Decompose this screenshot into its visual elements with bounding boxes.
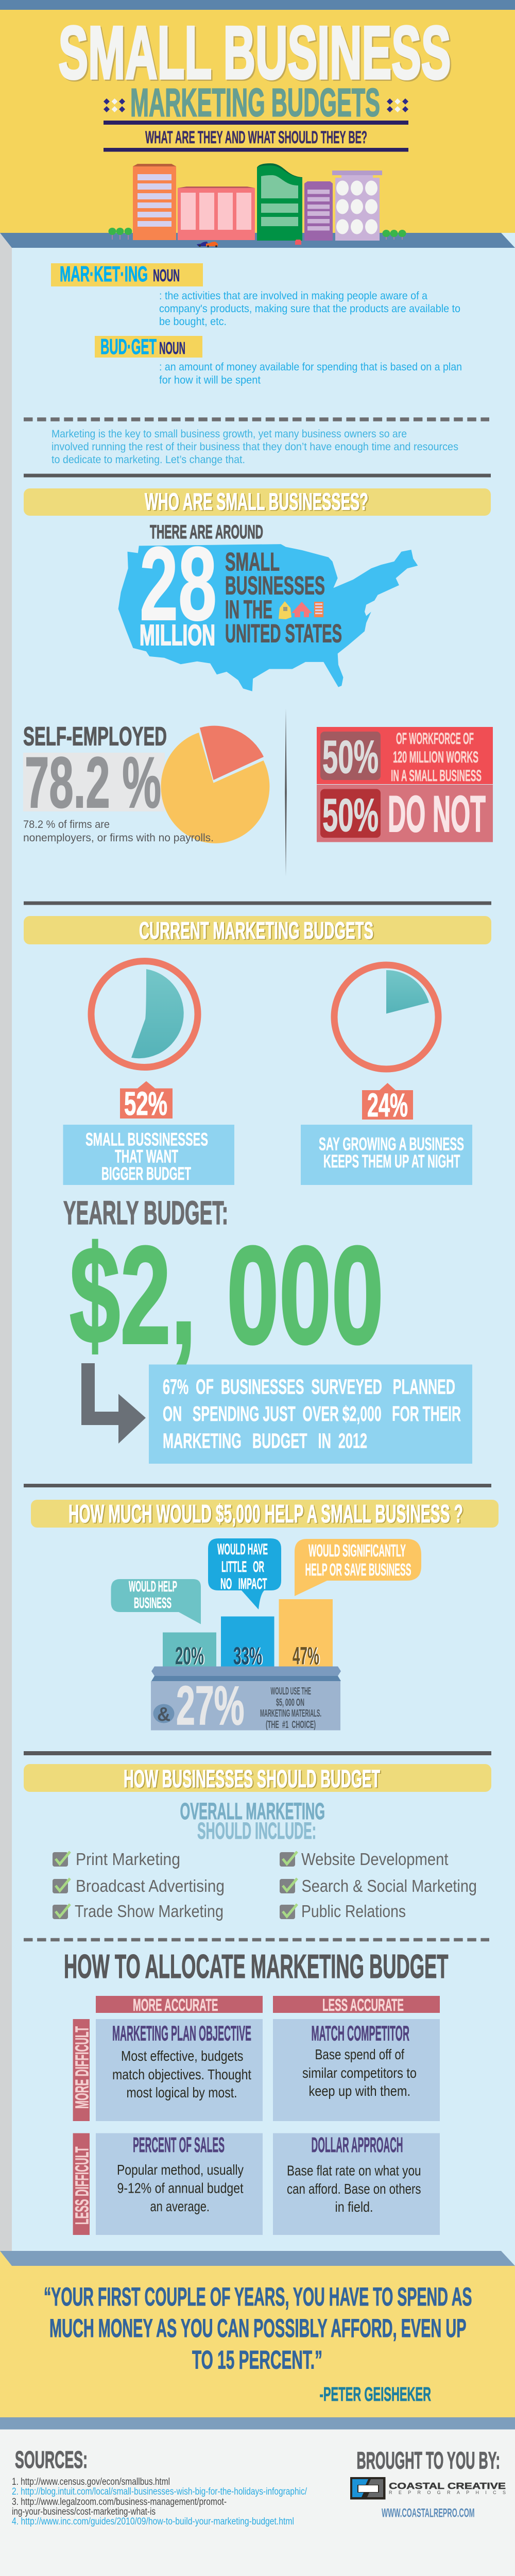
label: budget: NOUN xyxy=(159,338,185,358)
road band xyxy=(0,233,515,248)
text: small businesses in the united states: UNITED STATES xyxy=(225,619,342,648)
heading: who are small businesses xyxy=(24,488,491,516)
text: self-employed caption xyxy=(23,819,214,844)
cell: dollar approach: can afford. Base on others xyxy=(287,2181,421,2197)
cell: percent of sales: PERCENT OF SALES xyxy=(133,2133,225,2157)
callout: 67 percent xyxy=(149,1364,472,1464)
text: small businesses in the united states: BUSINESSES xyxy=(225,571,325,600)
background: light blue body xyxy=(0,232,515,2267)
heading: current marketing budgets xyxy=(24,916,491,945)
list: sources: ing-your-business/cost-marketing-what-is xyxy=(12,2506,156,2517)
callout: keeps them up at night xyxy=(301,1125,472,1185)
bubble: significantly help: WOULD SIGNIFICANTLY xyxy=(308,1541,406,1560)
tag: 24 percent: 24% xyxy=(367,1087,408,1124)
cell: dollar approach: Base flat rate on what you xyxy=(287,2163,421,2178)
text: million: MILLION xyxy=(140,619,215,652)
text: small businesses in the united states: IN THE xyxy=(225,595,272,624)
stat: 50 percent do not xyxy=(317,785,493,842)
building: orange xyxy=(133,164,176,240)
panel: workforce split xyxy=(317,727,493,842)
icon: tiny buildings xyxy=(279,601,323,619)
left gray side strip xyxy=(0,233,12,2252)
text: small businesses in the united states: SMALL xyxy=(225,547,280,576)
list: sources: 2. http://blog.intuit.com/local/small-businesses-wish-big-for-the-holidays-infographic/ xyxy=(12,2486,307,2497)
icon: right diamonds xyxy=(387,98,408,112)
heading: yearly budget: YEARLY BUDGET: xyxy=(63,1194,228,1231)
header: more accurate xyxy=(96,1995,263,2014)
panel: footer xyxy=(0,2430,515,2576)
text: small businesses in the united states xyxy=(225,547,342,648)
text: introduction xyxy=(52,428,458,466)
pedestal: 27 percent: WOULD USE THE xyxy=(271,1686,311,1697)
building: pink xyxy=(178,187,255,240)
side label: more difficult: MORE DIFFICULT xyxy=(71,2026,93,2109)
callout: bigger budget xyxy=(63,1125,234,1185)
number: 78.2 percent: 78.2 % xyxy=(25,742,161,823)
item: broadcast advertising: Broadcast Advertising xyxy=(76,1876,225,1895)
panel: quote xyxy=(0,2251,515,2430)
label: marketing: MAR·KET·ING xyxy=(60,262,148,286)
cell: match competitor: keep up with them. xyxy=(309,2083,410,2099)
bubble: little or no impact: NO IMPACT xyxy=(220,1575,267,1592)
arrow xyxy=(81,1363,146,1444)
text: marketing definition: be bought, etc. xyxy=(159,316,227,328)
text: quote: TO 15 PERCENT.” xyxy=(192,2345,322,2374)
stat: 50 percent work in small business: 50% xyxy=(322,732,379,783)
stat: 50 percent do not: 50% xyxy=(322,790,379,841)
icon: cars xyxy=(197,240,301,247)
callout: bigger budget: BIGGER BUDGET xyxy=(101,1163,191,1184)
item: search and social marketing: Search & Social Marketing xyxy=(302,1876,477,1895)
bubble: little or no impact: LITTLE OR xyxy=(221,1558,264,1575)
cell: percent of sales: an average. xyxy=(150,2198,210,2214)
number: 2,000 dollars: 000 xyxy=(227,1218,384,1373)
cell: match competitor: Base spend off of xyxy=(315,2046,404,2062)
panel: self-employed xyxy=(23,721,269,844)
icon: left diamonds xyxy=(104,98,125,112)
header: less accurate xyxy=(273,1995,440,2014)
bar: 33 percent: 33% xyxy=(234,1643,263,1670)
heading: how businesses should budget xyxy=(24,1764,491,1794)
text: self-employed caption: nonemployers, or firms with no payrolls. xyxy=(23,832,214,844)
heading: who are small businesses: WHO ARE SMALL BUSINESSES? xyxy=(145,488,368,515)
cell: match competitor: similar competitors to xyxy=(302,2065,417,2081)
bubble: would help: BUSINESS xyxy=(134,1595,171,1612)
list: sources: 3. http://www.legalzoom.com/business-management/promot- xyxy=(12,2497,227,2507)
building: purple xyxy=(304,181,333,241)
pedestal: 27 percent: $5, 000 ON xyxy=(276,1697,304,1708)
stat box: 78.2 percent xyxy=(23,753,165,811)
callout: bigger budget: SMALL BUSSINESSES xyxy=(85,1129,208,1150)
text: attribution: -PETER GEISHEKER xyxy=(319,2384,431,2405)
bar: 47 percent xyxy=(279,1599,333,1670)
bar: 33 percent xyxy=(221,1617,274,1670)
text: introduction: involved running the rest of their business that they don’t have enough time and resources xyxy=(52,441,458,453)
text: overall marketing should include: SHOULD INCLUDE: xyxy=(197,1818,316,1844)
bar: 20 percent: 20% xyxy=(175,1642,204,1670)
chart: 24 percent xyxy=(334,965,438,1069)
item: public relations: Public Relations xyxy=(301,1902,406,1921)
chart: 52 percent xyxy=(91,961,198,1067)
label: budget: BUD·GET xyxy=(100,334,157,359)
text: budget definition: for how it will be spent xyxy=(159,374,261,386)
bubble: little or no impact xyxy=(208,1538,281,1609)
heading: who are small businesses: WHO ARE SMALL BUSINESSES? xyxy=(146,489,369,516)
side label: more difficult xyxy=(71,2019,93,2121)
text: overall marketing should include: OVERALL MARKETING xyxy=(180,1798,325,1824)
logo: coastal creative: REPROGRAPHICS xyxy=(389,2490,506,2495)
logo: coastal creative: COASTAL CREATIVE xyxy=(389,2481,506,2491)
text: introduction: Marketing is the key to small business growth, yet many business owners so are xyxy=(52,428,407,440)
icon: left trees xyxy=(108,228,132,240)
stat: 50 percent work in small business xyxy=(317,727,493,785)
text: introduction: to dedicate to marketing. Let’s change that. xyxy=(52,454,245,466)
label: marketing: NOUN xyxy=(153,266,180,285)
list: sources: 1. http://www.census.gov/econ/smallbus.html xyxy=(12,2477,170,2487)
pie chart: 78.2 percent xyxy=(161,726,269,843)
number: 2,000 dollars xyxy=(70,1218,384,1373)
text: marketing definition xyxy=(159,290,460,328)
pedestal: 27 percent xyxy=(151,1666,341,1736)
tag: 24 percent xyxy=(362,1083,413,1124)
cell: marketing plan objective: Most effective, budgets xyxy=(121,2048,243,2064)
list: sources: 4. http://www.inc.com/guides/2010/09/how-to-build-your-marketing-budget.html xyxy=(12,2516,294,2527)
heading: sources: SOURCES: xyxy=(15,2446,88,2473)
bubble: would help xyxy=(111,1579,201,1624)
bar: 47 percent: 47% xyxy=(293,1642,319,1670)
list: sources xyxy=(12,2477,307,2527)
bubble: significantly help xyxy=(295,1539,421,1596)
cell: dollar approach xyxy=(273,2133,440,2235)
number: 2,000 dollars: $2, xyxy=(70,1218,196,1373)
side label: less difficult: LESS DIFFICULT xyxy=(71,2146,93,2225)
cell: percent of sales: 9-12% of annual budget xyxy=(117,2180,244,2196)
cell: percent of sales: Popular method, usually xyxy=(117,2162,244,2178)
item: website development: Website Development xyxy=(301,1850,448,1869)
pedestal: 27 percent: 27% xyxy=(176,1674,244,1736)
cell: marketing plan objective: match objectives. Thought xyxy=(112,2066,251,2082)
pedestal: 27 percent: MARKETING MATERIALS. xyxy=(260,1708,321,1719)
panel: definitions xyxy=(51,262,462,386)
text: marketing definition: company's products, making sure that the products are available to xyxy=(159,303,460,315)
header: less accurate: LESS ACCURATE xyxy=(322,1995,404,2014)
panel: header xyxy=(0,0,515,233)
text: there are around: THERE ARE AROUND xyxy=(150,521,263,543)
bar: 20 percent: 20% xyxy=(176,1643,205,1670)
icon: right trees xyxy=(382,230,406,240)
text: budget definition xyxy=(159,361,462,386)
building: green xyxy=(257,163,302,241)
table: allocation matrix xyxy=(71,1995,440,2235)
pedestal: 27 percent: (THE #1 CHOICE) xyxy=(266,1719,316,1731)
text: marketing definition: : the activities that are involved in making people aware of a xyxy=(159,290,427,302)
bar: 20 percent xyxy=(163,1632,216,1670)
logo: coastal creative xyxy=(350,2477,506,2500)
cell: percent of sales xyxy=(96,2133,263,2235)
number: 28: 28 xyxy=(140,526,217,642)
map: united states with 28 million xyxy=(118,526,418,691)
building: lavender xyxy=(332,171,382,241)
text: quote xyxy=(44,2282,472,2374)
bar: 47 percent: 47% xyxy=(293,1643,320,1670)
callout: bigger budget: THAT WANT xyxy=(115,1146,178,1166)
item: trade show marketing: Trade Show Marketing xyxy=(75,1902,224,1921)
cell: marketing plan objective: most logical by most. xyxy=(127,2084,237,2100)
bubble: would help: WOULD HELP xyxy=(129,1579,177,1595)
side label: less difficult xyxy=(71,2133,93,2235)
cell: dollar approach: in field. xyxy=(335,2199,373,2215)
header: more accurate: MORE ACCURATE xyxy=(133,1995,218,2014)
item: print marketing: Print Marketing xyxy=(76,1850,180,1869)
bar: 33 percent: 33% xyxy=(233,1642,262,1670)
tag: 52 percent xyxy=(120,1081,173,1122)
table: allocation matrix: MARKETING PLAN OBJECTIVE xyxy=(112,2022,251,2045)
callout: 67 percent: MARKETING BUDGET IN 2012 xyxy=(163,1429,367,1453)
illustration: buildings xyxy=(108,163,406,247)
cell: marketing plan objective xyxy=(96,2019,263,2121)
chart: 5000 help bars xyxy=(111,1538,421,1736)
text: budget definition: : an amount of money available for spending that is based on a plan xyxy=(159,361,462,373)
pedestal: 27 percent: & xyxy=(157,1704,170,1725)
bubble: little or no impact: WOULD HAVE xyxy=(217,1541,268,1558)
checklist: marketing types xyxy=(53,1850,477,1921)
text: overall marketing should include xyxy=(180,1798,325,1844)
tag: 52 percent: 52% xyxy=(124,1085,167,1122)
cell: match competitor xyxy=(273,2019,440,2121)
heading: self-employed: SELF-EMPLOYED xyxy=(23,721,167,751)
text: self-employed caption: 78.2 % of firms are xyxy=(23,819,110,831)
